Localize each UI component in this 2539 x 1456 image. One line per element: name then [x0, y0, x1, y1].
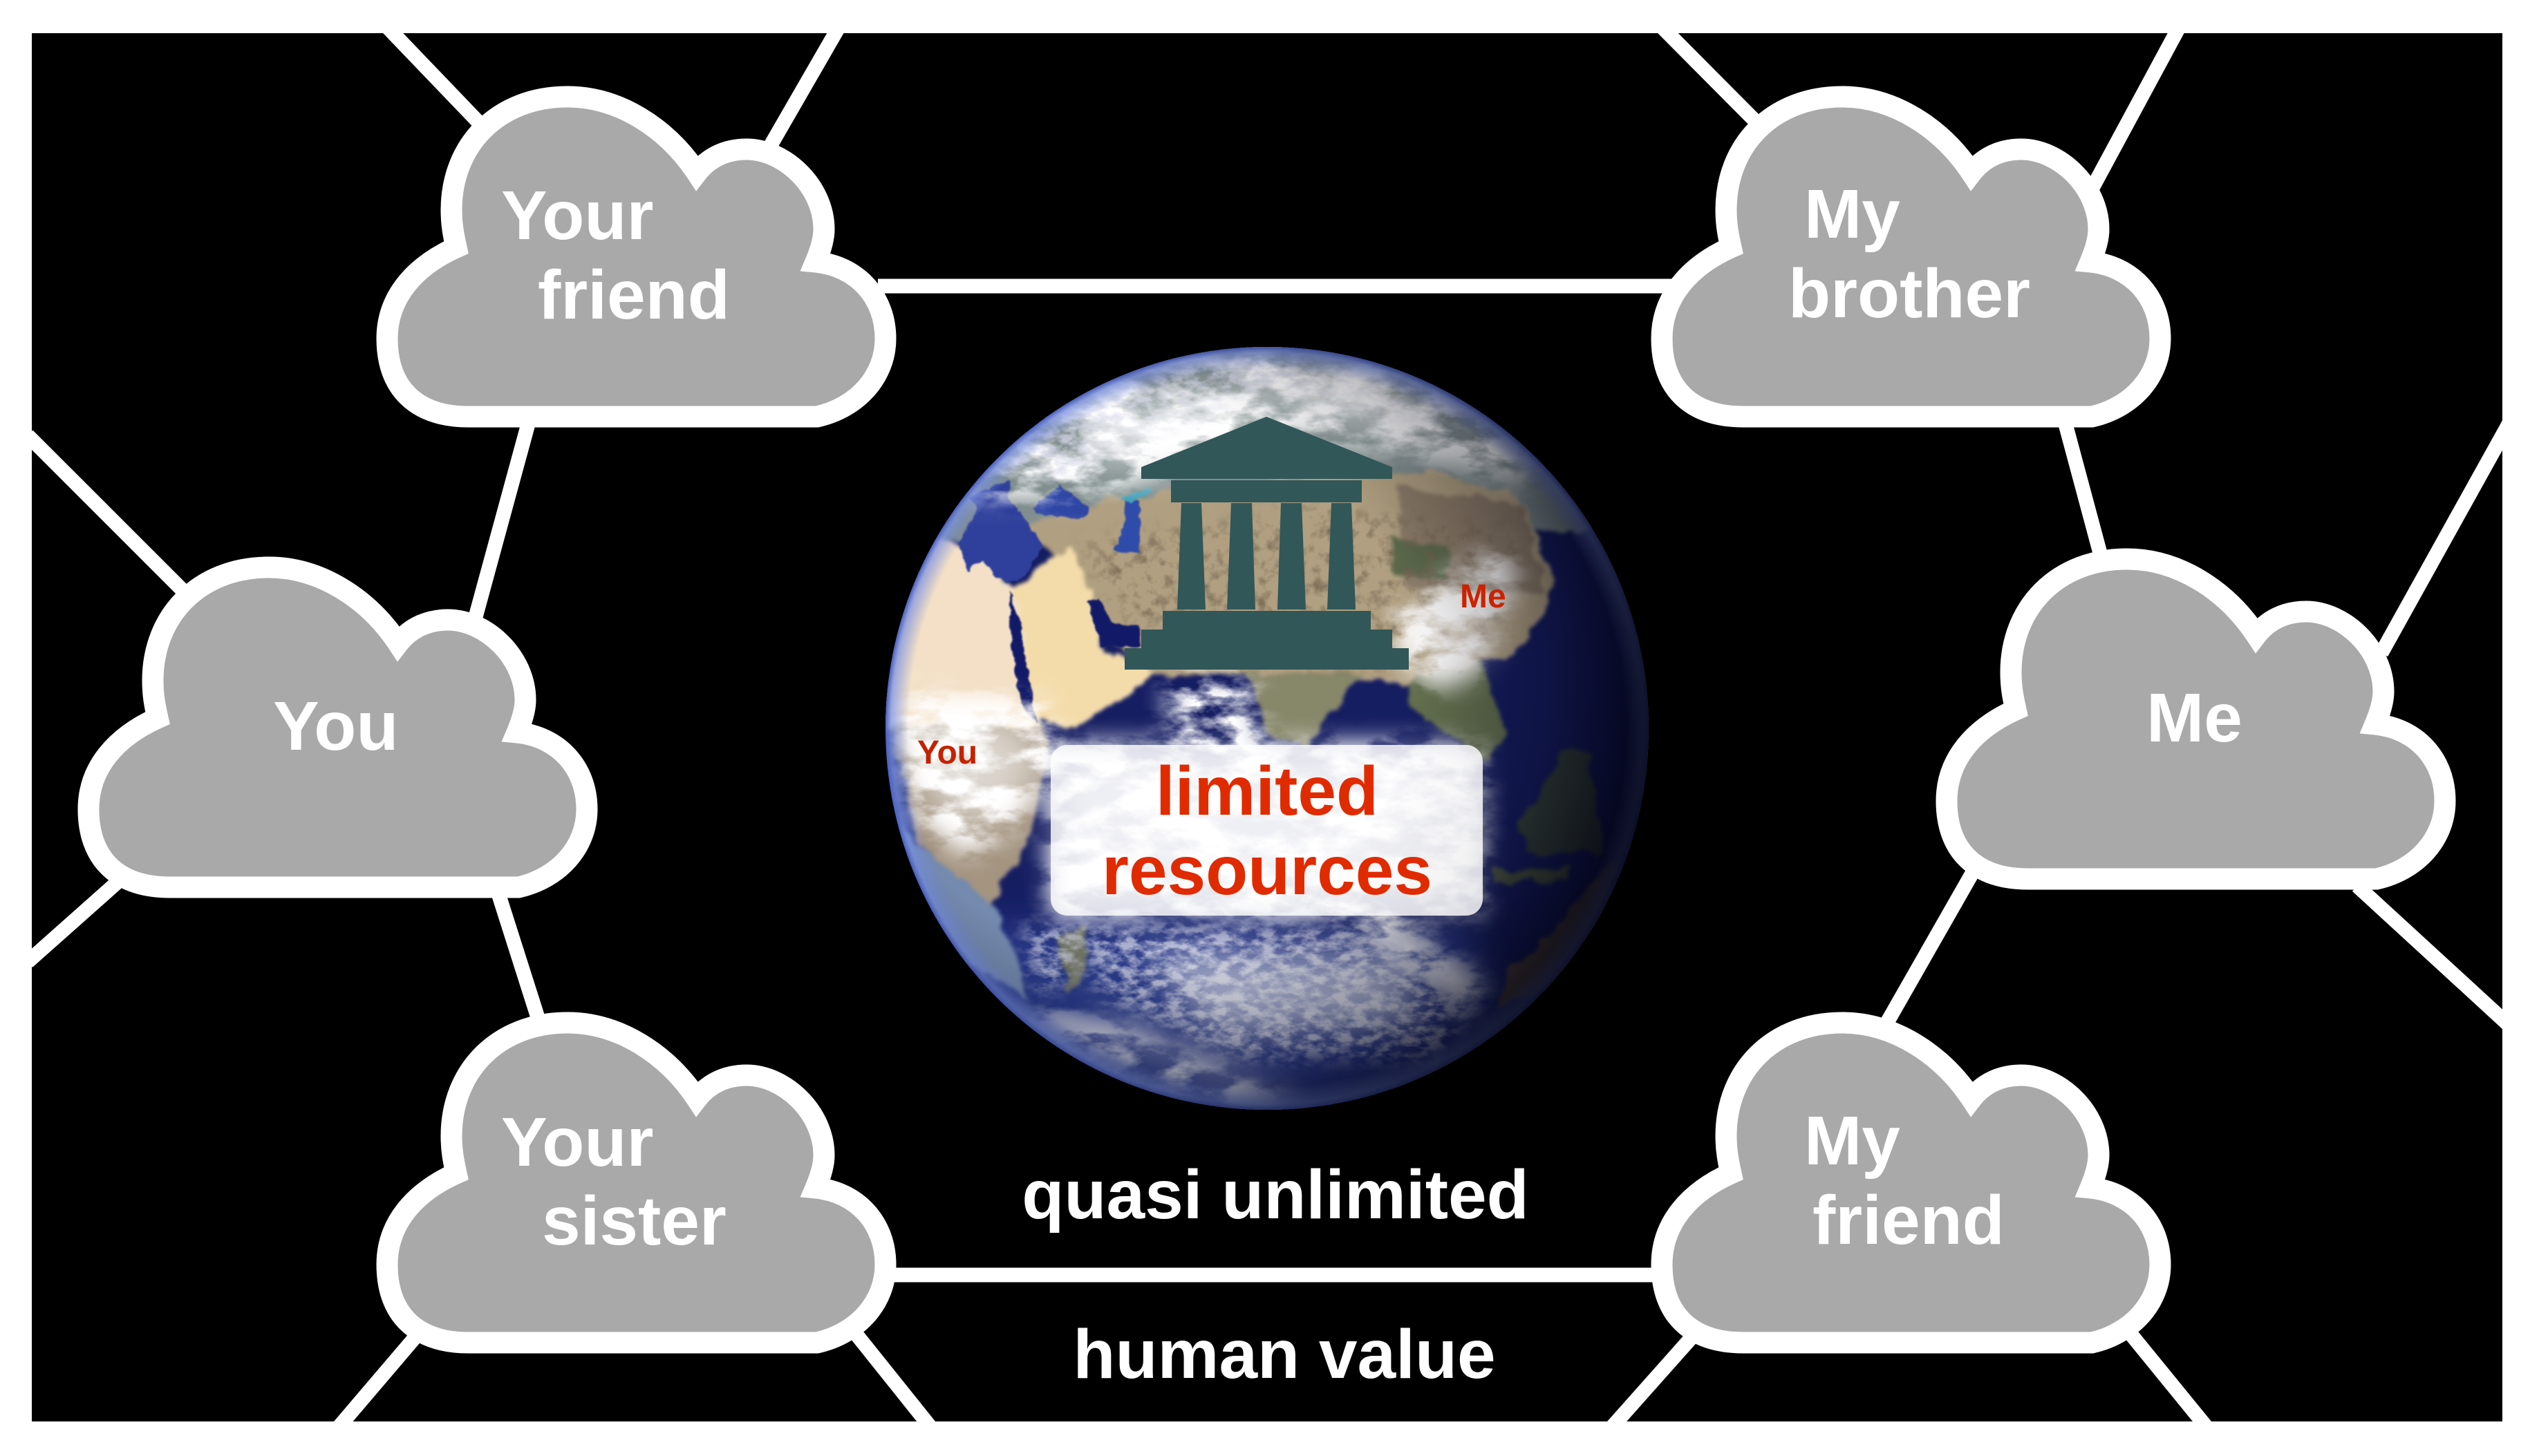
caption: quasi unlimited: quasi unlimited — [1022, 1156, 1529, 1233]
cloud: Your friend: Your — [501, 177, 653, 254]
caption: human value: human value — [1073, 1316, 1496, 1393]
callout: limited resources: resources — [1102, 832, 1432, 909]
cloud: Your sister: sister — [542, 1182, 727, 1260]
cloud: My friend — [1662, 1023, 2160, 1343]
atmosphere rim — [883, 345, 1651, 1112]
cloud: You: You — [273, 688, 398, 765]
earth globe — [878, 325, 1659, 1133]
cloud: Your sister: Your — [501, 1104, 653, 1181]
fine southern cloud field — [1008, 354, 1480, 1092]
land masses — [886, 347, 1609, 1006]
cloud: Me: Me — [2146, 679, 2242, 757]
cloud: You — [88, 567, 587, 887]
southern ocean lighter water — [968, 926, 1521, 1133]
cloud: My brother: brother — [1788, 255, 2030, 332]
cloud: My friend: My — [1804, 1102, 1900, 1180]
land texture — [1078, 504, 1521, 670]
callout: limited resources: limited — [1156, 753, 1378, 830]
cloud: Your friend: friend — [538, 256, 730, 334]
night-side shading — [883, 345, 1651, 1112]
ocean base — [883, 345, 1651, 1112]
cloud: My brother — [1662, 97, 2160, 417]
cloud: Your sister — [387, 1023, 886, 1343]
cloud: Your friend — [387, 97, 886, 417]
inland seas — [959, 480, 1153, 724]
main cloud masses — [888, 339, 1542, 1106]
cloud: Me — [1947, 559, 2445, 879]
icon: classical temple — [1125, 417, 1409, 670]
callout: limited resources — [1051, 745, 1483, 916]
cloud: My brother: My — [1804, 176, 1900, 253]
small label: Me: Me — [1460, 578, 1506, 615]
cloud: My friend: friend — [1812, 1182, 2005, 1259]
small label: You: You — [917, 735, 977, 771]
soft white haze — [899, 366, 1500, 1099]
